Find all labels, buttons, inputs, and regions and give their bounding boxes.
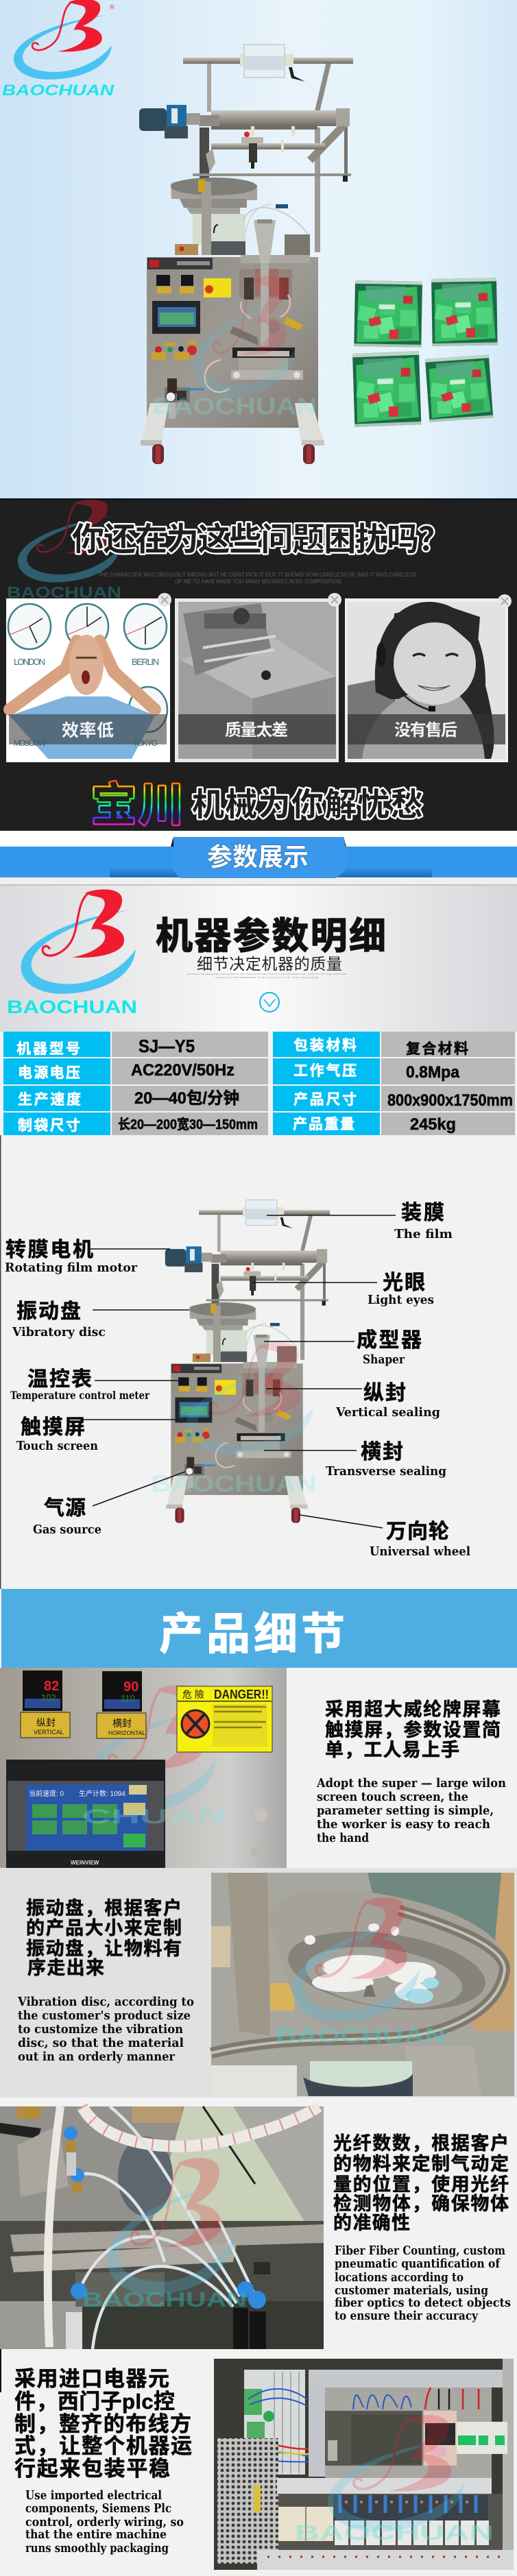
panel: hero product showcase — [0, 0, 517, 500]
callout: gas source — [33, 1497, 101, 1537]
callout: shaper: Shaper — [363, 1352, 405, 1367]
text: vibration disc english: disc, so that the material — [18, 2036, 184, 2050]
callout: universal wheel — [370, 1520, 470, 1559]
photo: control panel: 102 — [41, 1692, 56, 1703]
text: touch screen english — [316, 1776, 506, 1845]
callout: touch screen — [16, 1416, 98, 1453]
parameter labels: 包装材料 — [293, 1038, 357, 1054]
card: low efficiency: MOSCOW — [14, 738, 47, 748]
text: electrical english: runs smoothly packaging — [25, 2541, 169, 2555]
heading: parameter display: 参数展示 — [207, 843, 309, 871]
callout: temperature control meter: 温控表 — [27, 1368, 92, 1391]
text: electrical english: control, orderly wiring, so — [25, 2515, 184, 2529]
photo: control panel — [0, 1668, 287, 1868]
text: vibration disc english — [17, 1995, 194, 2064]
text: electrical chinese — [14, 2367, 192, 2481]
parameter labels: 工作气压 — [293, 1063, 357, 1079]
callout: transverse sealing — [326, 1441, 446, 1479]
parameter values — [118, 1036, 513, 1134]
text: fiber counting english: pneumatic quantification of — [335, 2257, 501, 2271]
photo: vibration disc bowl: BAOCHUAN — [276, 2024, 446, 2048]
photo: control panel: 危 險 — [182, 1689, 204, 1700]
decorative tiny caption — [187, 973, 347, 979]
text: touch screen chinese: 单，工人易上手 — [325, 1740, 459, 1760]
callout: universal wheel: 万向轮 — [386, 1520, 449, 1543]
text: electrical english: Use imported electrical — [25, 2488, 162, 2503]
callout: touch screen: Touch screen — [16, 1439, 98, 1453]
text: fiber counting chinese: 的物料来定制气动定 — [333, 2154, 509, 2174]
subtitle: small english: THE CHARACTER WAS OBVIOUSLY WRONG BUT HE DIDNT PICK IT OUT. IT SHOWS HOW CARELESS HE WAS IT WAS CARELESS — [98, 572, 416, 578]
callout: rotating film motor: 转膜电机 — [5, 1239, 93, 1261]
photo: control panel: 110 — [121, 1693, 135, 1703]
parameter labels: 机器型号 — [16, 1041, 80, 1057]
slogan: solving your worries: 机械为你解忧愁 — [192, 786, 423, 823]
card: low efficiency: LONDON — [14, 657, 45, 667]
text: touch screen chinese: 触摸屏，参数设置简 — [325, 1720, 501, 1740]
table: machine parameters — [0, 1032, 517, 1135]
parameter labels: 产品尺寸 — [293, 1092, 357, 1108]
image: packaging machine: BAOCHUAN — [152, 393, 317, 420]
watermark logo: BAOCHUAN — [7, 583, 121, 601]
logo: large Baochuan — [7, 889, 137, 1017]
banner: product details — [0, 1589, 517, 1668]
text: fiber counting chinese: 量的位置，使用光纤 — [333, 2174, 509, 2195]
subtitle: small english — [98, 572, 416, 585]
callout lines — [82, 1215, 396, 1528]
callout: vertical sealing: Vertical sealing — [335, 1405, 440, 1420]
panel: machine parameter header — [0, 884, 517, 1032]
callout: the film — [394, 1202, 453, 1241]
text: fiber counting chinese — [333, 2133, 509, 2233]
heading: machine parameters: 机器参数明细 — [156, 916, 386, 957]
photo: control panel: DANGER!! — [214, 1688, 269, 1701]
image: packaging machine diagram: BAOCHUAN — [151, 1471, 317, 1497]
image: packaging machine — [139, 45, 353, 464]
logo: Baochuan: R — [110, 4, 115, 12]
text: vibration disc english: out in an orderly manner — [18, 2050, 175, 2064]
text: fiber counting english: locations according to — [335, 2270, 464, 2285]
subtitle: small english: OF ME TO HAVE MADE TOO MANY MISTAKES IN MY COMPOSITION — [175, 579, 341, 585]
card: low efficiency: TOKYO — [133, 738, 158, 748]
photo: control panel: CHUAN — [82, 1806, 226, 1828]
text: vibration disc english: Vibration disc, according to — [17, 1995, 194, 2009]
panel: customer pain points — [0, 500, 517, 831]
panel: fiber counting detail — [0, 2098, 517, 2349]
text: touch screen english: the hand — [317, 1831, 369, 1845]
callout: the film: 装膜 — [401, 1202, 444, 1224]
panel: electrical components detail — [0, 2349, 517, 2576]
text: vibration disc english: the customer's product size — [18, 2008, 191, 2023]
callout: vertical sealing — [335, 1382, 440, 1420]
photo: electrical cabinet: BAOCHUAN — [295, 2520, 494, 2544]
callout: gas source: Gas source — [33, 1522, 101, 1537]
text: vibration disc chinese — [26, 1898, 182, 1978]
text: fiber counting english: customer materials, using — [335, 2283, 488, 2298]
icon: circled chevron — [260, 993, 279, 1012]
parameter values: 复合材料 — [406, 1041, 468, 1057]
parameter values: 245kg — [410, 1115, 456, 1134]
label: poor quality: 质量太差 — [225, 721, 288, 740]
card: no after-sales — [345, 594, 512, 762]
text: electrical english: components, Siemens Plc — [25, 2501, 171, 2516]
photo: control panel: HORIZONTAL — [108, 1729, 145, 1736]
text: touch screen chinese — [325, 1699, 501, 1760]
callout: vibratory disc: 振动盘 — [16, 1300, 81, 1323]
text: vibration disc english: to customize the vibration — [18, 2022, 183, 2037]
text: vibration disc chinese: 的产品大小来定制 — [26, 1918, 182, 1939]
text: touch screen english: the worker is easy to reach — [317, 1817, 490, 1832]
photo: fiber optic tubing: BAOCHUAN — [82, 2287, 247, 2311]
parameter values: SJ—Y5 — [139, 1036, 195, 1056]
text: vibration disc chinese: 序走出来 — [27, 1958, 104, 1978]
logo: large Baochuan: BAOCHUAN — [7, 997, 137, 1017]
parameter labels: 制袋尺寸 — [18, 1118, 80, 1134]
parameter labels: 生产速度 — [18, 1092, 81, 1108]
callout: gas source: 气源 — [44, 1497, 86, 1520]
callout: universal wheel: Universal wheel — [370, 1544, 470, 1559]
parameter values: 0.8Mpa — [406, 1063, 460, 1082]
text: electrical english: that the entire machine — [25, 2527, 167, 2542]
logo: Baochuan — [2, 0, 115, 99]
photo: control panel: VERTICAL — [34, 1729, 64, 1736]
callout: transverse sealing: 横封 — [361, 1441, 403, 1463]
card: low efficiency: BERLIN — [132, 657, 159, 667]
text: vibration disc chinese: 振动盘，让物料有 — [26, 1939, 182, 1959]
text: fiber counting chinese: 光纤数数，根据客户 — [333, 2133, 509, 2154]
text: electrical chinese: 式，让整个机器运 — [14, 2434, 192, 2458]
photo: vibration disc bowl — [211, 1873, 514, 2096]
text: fiber counting english — [335, 2244, 511, 2323]
photo: fiber optic tubing — [0, 2106, 324, 2349]
text: vibration disc chinese: 振动盘，根据客户 — [26, 1898, 182, 1919]
callout: shaper: 成型器 — [357, 1329, 422, 1352]
panel: labelled machine diagram — [0, 1135, 517, 1590]
decorative tiny caption: DETAILS DETERMINE THE QUALITY OF THE MACHINE DETAILS DETERMINE THE QUALITY OF THE MACHINE — [187, 973, 347, 975]
text: touch screen english: screen touch screen, the — [317, 1790, 468, 1804]
card: low efficiency — [6, 593, 171, 762]
subtitle: details decide quality: 细节决定机器的质量 — [197, 955, 342, 973]
text: electrical chinese: 件，西门子plc控 — [14, 2390, 175, 2414]
heading: product details: 产品细节 — [159, 1609, 345, 1659]
callout: rotating film motor: Rotating film motor — [5, 1261, 137, 1275]
photo: control panel: 生产计数: 1094 — [79, 1789, 125, 1798]
image: packaging machine diagram — [151, 1200, 330, 1523]
panel: touch screen detail — [0, 1668, 517, 1868]
photo: control panel: 90 — [123, 1679, 139, 1694]
photo: electrical cabinet — [214, 2359, 514, 2570]
callout: temperature control meter: Temperature control meter — [10, 1389, 149, 1402]
label: low efficiency: 效率低 — [62, 721, 114, 740]
callout: transverse sealing: Transverse sealing — [326, 1464, 446, 1479]
callout: vibratory disc: Vibratory disc — [12, 1325, 106, 1339]
callout: light eyes: 光眼 — [383, 1272, 425, 1294]
parameter labels — [16, 1038, 357, 1134]
text: touch screen chinese: 采用超大威纶牌屏幕 — [325, 1699, 501, 1720]
callout: rotating film motor — [5, 1239, 137, 1275]
parameter labels: 电源电压 — [18, 1065, 80, 1081]
callout: vibratory disc — [12, 1300, 106, 1339]
callout: vertical sealing: 纵封 — [363, 1382, 406, 1405]
text: electrical chinese: 采用进口电器元 — [14, 2367, 169, 2391]
watermark logo — [7, 500, 121, 601]
panel: vibration disc detail — [0, 1868, 517, 2098]
parameter labels: 产品重量 — [293, 1117, 354, 1132]
callout: shaper — [357, 1329, 422, 1367]
callout: light eyes — [368, 1272, 434, 1307]
callout: temperature control meter — [10, 1368, 149, 1402]
callout: the film: The film — [394, 1227, 453, 1241]
text: fiber counting english: fiber optics to detect objects — [335, 2296, 511, 2310]
heading: pain point question: 你还在为这些问题困扰吗？ — [72, 521, 450, 557]
slogan: rainbow brand name: 宝川 — [91, 779, 184, 830]
text: touch screen english: parameter setting is simple, — [317, 1803, 494, 1818]
parameter values: 20—40包/分钟 — [134, 1089, 239, 1108]
text: fiber counting chinese: 的准确性 — [333, 2213, 410, 2233]
banner: parameter display — [0, 831, 517, 886]
callout: touch screen: 触摸屏 — [21, 1416, 85, 1439]
text: fiber counting english: Fiber Fiber Counting, custom — [335, 2244, 505, 2258]
card: poor quality — [175, 593, 341, 762]
photo: control panel: 当前速度: 0 — [29, 1789, 64, 1798]
parameter values: 长20—200宽30—150mm — [118, 1116, 258, 1132]
logo: Baochuan: BAOCHUAN — [2, 82, 115, 99]
text: fiber counting english: to ensure their accuracy — [335, 2309, 479, 2323]
text: electrical english — [25, 2488, 184, 2555]
callout: light eyes: Light eyes — [368, 1293, 434, 1307]
photo: control panel: WEINVIEW — [71, 1860, 99, 1866]
parameter values: AC220V/50Hz — [131, 1061, 235, 1080]
text: touch screen english: Adopt the super — large wilon — [316, 1776, 506, 1790]
photo: control panel: 横封 — [112, 1718, 132, 1729]
text: fiber counting chinese: 检测物体，确保物体 — [333, 2194, 509, 2214]
photo: control panel: 82 — [44, 1679, 59, 1694]
decorative tiny caption: DETAILS DETERMINE THE QUALITY OF THE MACHINE — [215, 976, 319, 979]
text: electrical chinese: 制，整齐的布线方 — [14, 2412, 191, 2436]
label: no after-sales: 没有售后 — [394, 721, 457, 740]
photo: control panel: 纵封 — [36, 1717, 56, 1728]
text: electrical chinese: 行起来包装平稳 — [14, 2457, 170, 2481]
image: four finished packets — [352, 278, 498, 427]
